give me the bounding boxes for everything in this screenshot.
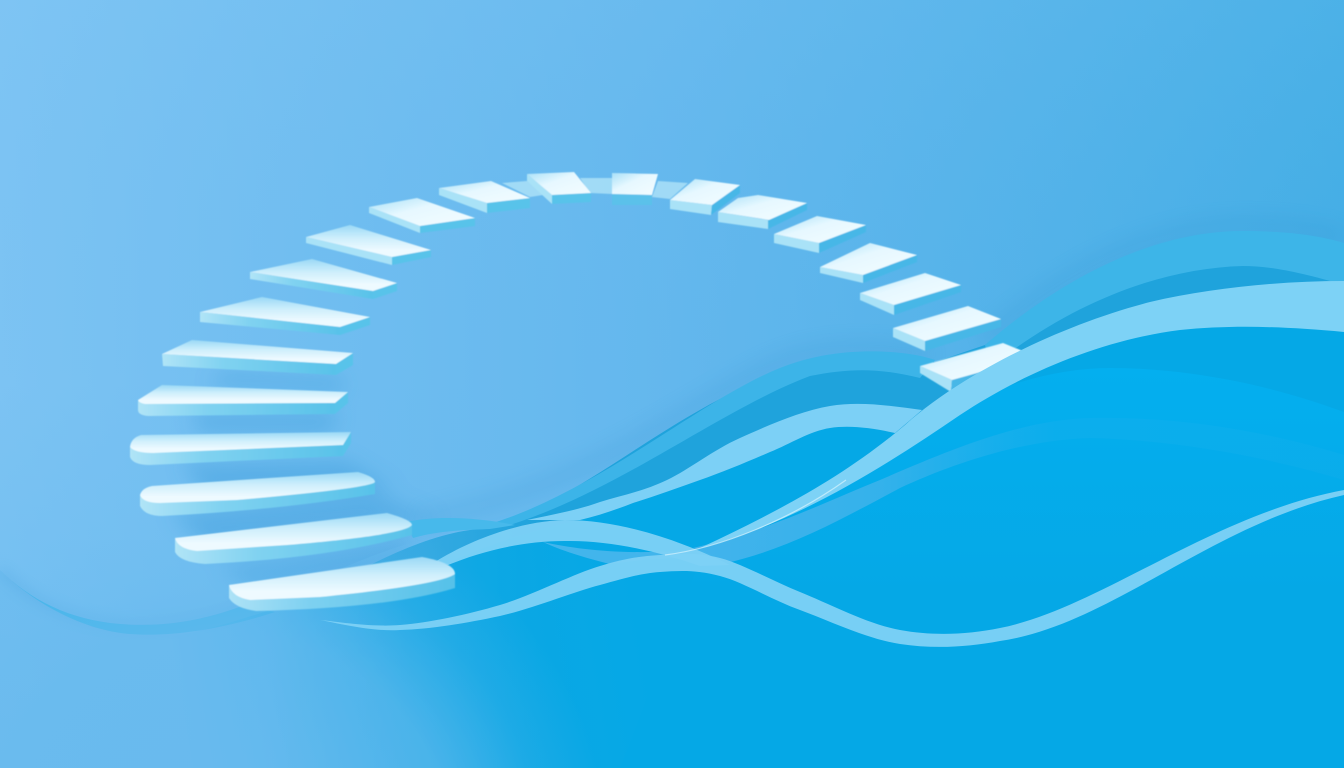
wave: front body: [620, 368, 1344, 768]
step 3: [140, 472, 375, 516]
wave: lower band inside the water: [693, 418, 1344, 563]
bottom left haze: [0, 540, 800, 768]
step 6: [162, 340, 353, 375]
step 8: [250, 259, 397, 299]
step 15: [718, 195, 807, 229]
step 5: [138, 385, 348, 416]
wave: dark base layer: [270, 236, 1344, 768]
wave: low left band: [0, 540, 1344, 768]
step 12: [527, 172, 591, 204]
steps: spiral staircase: [130, 172, 1030, 564]
ribbon: long lower ribbon: [320, 490, 1344, 647]
wave shadows on the sky: [420, 226, 1344, 520]
step 19: [893, 306, 1001, 351]
step 7: [200, 297, 370, 335]
step 1: [229, 557, 455, 611]
wave: band behind the steps: [405, 518, 515, 538]
step 18: [860, 273, 961, 315]
step 2: [175, 513, 412, 564]
wave: small crossing band: [543, 542, 727, 564]
wave: light inner band: [527, 404, 922, 520]
wave: middle back band: [490, 351, 935, 525]
step 20: [920, 343, 1030, 392]
step 9: [306, 225, 431, 265]
ribbon: thin highlight streak: [665, 480, 846, 555]
step 11: [439, 181, 530, 213]
soft step shadows: [170, 372, 440, 590]
wave: upper back band: [985, 231, 1344, 366]
step 16: [774, 216, 866, 253]
step 13: [612, 173, 658, 205]
step 4: [130, 432, 351, 465]
wave: bright upper sweep: [700, 281, 1344, 548]
step 14: [670, 179, 740, 215]
wave: main water body: [150, 281, 1344, 768]
step 10: [369, 198, 475, 233]
ribbon: upper crossing ribbon: [435, 520, 730, 566]
ghost steps at the arc crown: [502, 178, 688, 199]
step 17: [820, 243, 917, 283]
